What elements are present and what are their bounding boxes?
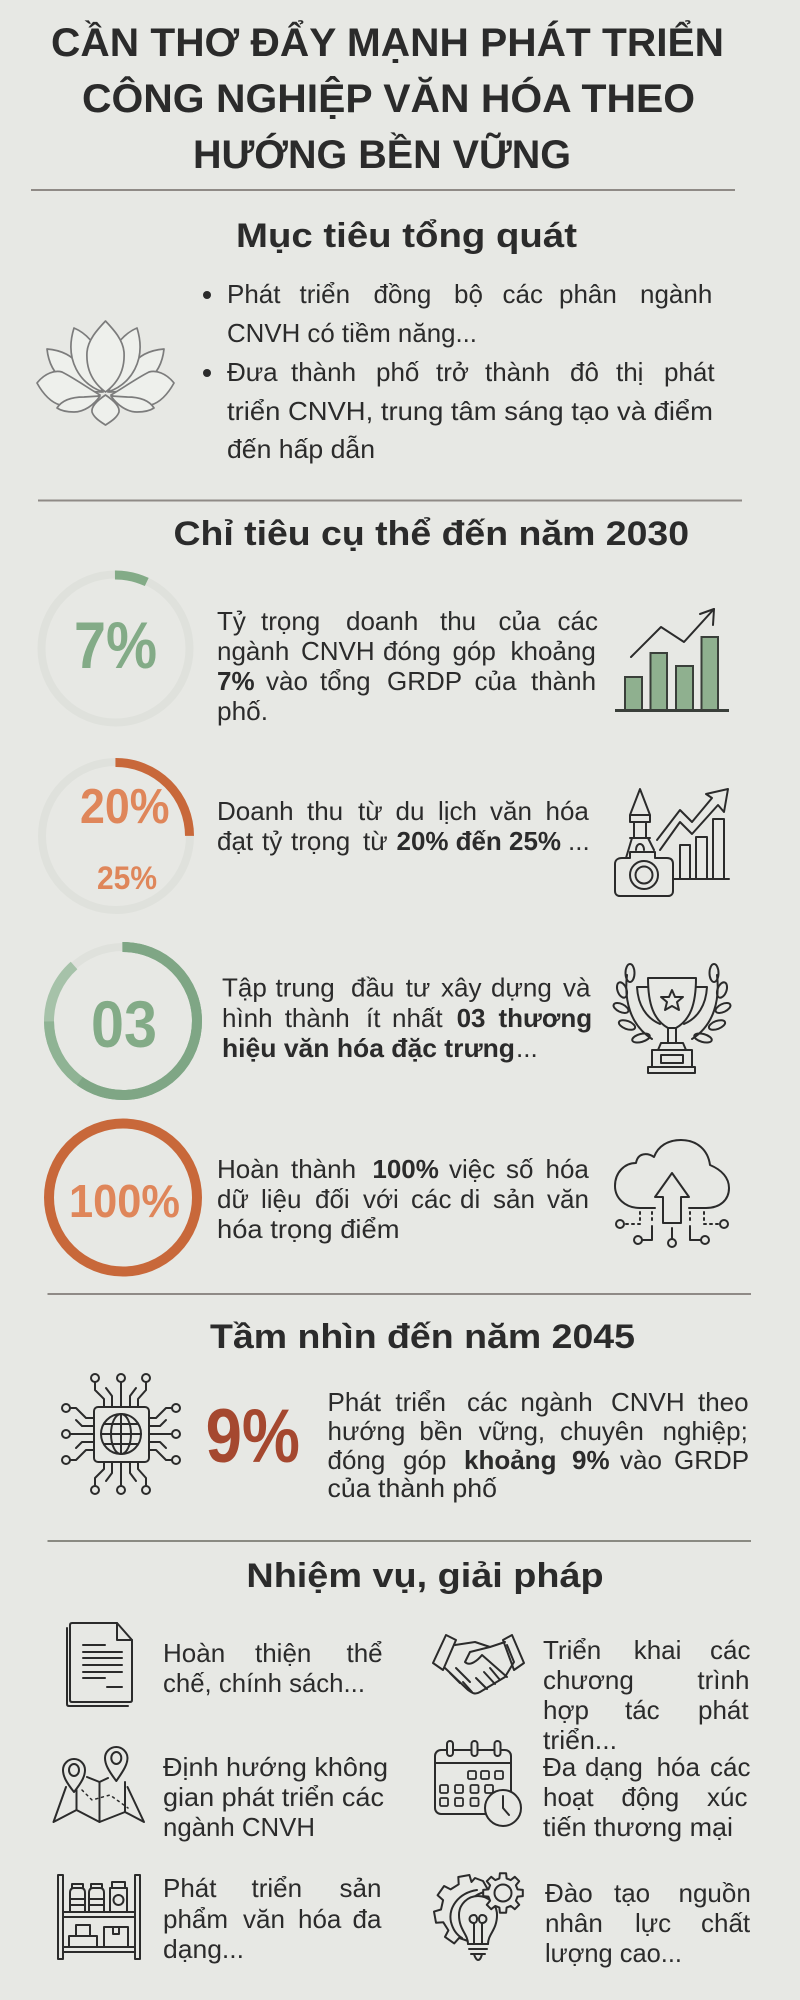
bullet list	[203, 279, 715, 464]
text: các	[710, 1752, 750, 1782]
bullet list: phát	[664, 357, 715, 387]
text	[545, 1878, 751, 1968]
text: 7%: vào	[266, 666, 315, 696]
text: triển	[252, 1873, 309, 1903]
text: ngành CNVH	[163, 1812, 315, 1842]
text: 03: đầu	[351, 972, 402, 1002]
text: 7%: tổng	[320, 666, 378, 696]
text: vision: các	[467, 1387, 515, 1417]
text: 03: dựng	[491, 972, 559, 1002]
text: 7%: ngành	[217, 636, 297, 666]
text: 03: tư	[406, 972, 437, 1002]
text: 100%: sản	[493, 1184, 542, 1214]
text: 100%: việc	[449, 1154, 502, 1184]
text	[543, 1752, 750, 1842]
text: 20-25%: lịch	[438, 796, 484, 826]
bullet list: Phát	[227, 279, 288, 309]
text: lực	[635, 1908, 678, 1938]
text: 03: nhất	[392, 1003, 450, 1033]
bullet list: phố	[376, 357, 427, 387]
text: nguồn	[678, 1878, 751, 1908]
text: phát	[698, 1695, 749, 1725]
text: 20-25%: từ	[363, 826, 395, 856]
text: động	[621, 1782, 686, 1812]
text: 7%: khoảng	[510, 636, 596, 666]
text: 20-25%: du	[396, 796, 432, 826]
text: khai	[634, 1635, 689, 1665]
text: triển...	[543, 1725, 617, 1755]
text: 03: ...	[516, 1033, 538, 1063]
text: 7%: của	[474, 666, 524, 696]
item: training	[434, 1873, 751, 1968]
progress ring 7%: 7%	[74, 608, 157, 682]
text: nhân	[545, 1908, 610, 1938]
text: 100%: với	[363, 1184, 406, 1214]
text: vision: theo	[698, 1387, 749, 1417]
text: 100%: di	[460, 1184, 487, 1214]
text	[163, 1752, 388, 1842]
text: sản	[340, 1873, 381, 1903]
text: 20-25%: đến	[456, 826, 509, 856]
icon: chip with globe	[62, 1374, 180, 1494]
icon: trophy with laurels	[612, 964, 732, 1073]
text: vision: Phát	[328, 1387, 388, 1417]
big number 9%: 9%	[206, 1394, 300, 1479]
progress ring 20-25%: 25%	[97, 860, 157, 896]
text: đa	[352, 1904, 382, 1934]
text: 100%: thành	[291, 1154, 363, 1184]
text: 7%: thành	[531, 666, 596, 696]
text: 20-25%: thu	[307, 796, 350, 826]
text: 7%: thu	[440, 606, 483, 636]
icon: map with pins	[54, 1747, 144, 1822]
text	[163, 1873, 382, 1964]
progress ring 7%	[42, 574, 190, 722]
text: hoạt	[543, 1782, 601, 1812]
bullet list: CNVH có tiềm năng...	[227, 318, 477, 348]
text: 100%	[217, 1154, 589, 1244]
text: tác	[625, 1695, 667, 1725]
text: 03	[222, 972, 592, 1063]
text: 20-25%: ...	[568, 826, 590, 856]
text: 7%: 7%	[217, 666, 262, 696]
bullet list: đến hấp dẫn	[227, 434, 375, 464]
progress ring 03: 03	[91, 987, 157, 1061]
text: vision	[328, 1387, 749, 1503]
text: 20-25%: 25%	[509, 826, 568, 856]
text: 20-25%: 20%	[396, 826, 456, 856]
text: vision: nghiệp;	[662, 1416, 748, 1446]
progress ring 20-25%: 20%	[80, 780, 170, 834]
bullet list: đồng	[374, 279, 439, 309]
bullet list: các	[502, 279, 550, 309]
heading: tasks and solutions: Nhiệm vụ, giải pháp	[246, 1557, 604, 1595]
text: 100%: Hoàn	[217, 1154, 286, 1184]
text: 20-25%: văn	[490, 796, 539, 826]
item: institutions	[67, 1623, 383, 1706]
text: 7%: trọng	[261, 606, 328, 636]
text: vision: khoảng	[464, 1445, 564, 1475]
text: 100%: dữ	[217, 1184, 256, 1214]
text: lượng cao...	[545, 1938, 682, 1968]
text: chất	[701, 1908, 751, 1938]
title	[51, 18, 724, 177]
text: 03: trung	[276, 972, 342, 1002]
text: 20-25%: từ	[358, 796, 390, 826]
text: 20-25%: hóa	[546, 796, 589, 826]
text: vision: đóng	[328, 1445, 393, 1475]
text: Phát	[163, 1873, 224, 1903]
text: 7%: góp	[452, 636, 503, 666]
text: 100%: hóa	[546, 1154, 589, 1184]
text: hợp	[543, 1695, 596, 1725]
text: 100%: hóa trọng điểm	[217, 1214, 400, 1244]
icon: cloud upload	[615, 1140, 729, 1247]
text: 03: hiệu văn hóa đặc trưng	[222, 1033, 515, 1063]
item: cooperation	[433, 1635, 750, 1755]
text: chế, chính sách...	[163, 1668, 365, 1698]
text: 100%: các	[411, 1184, 459, 1214]
text: vision: CNVH	[611, 1387, 692, 1417]
panel: target 20-25%	[42, 762, 729, 910]
text: Đa	[543, 1752, 583, 1782]
text: vision: vững,	[479, 1416, 552, 1446]
text: 7%: các	[558, 606, 598, 636]
text: 20-25%	[217, 796, 590, 856]
bullet list: đô	[570, 357, 606, 387]
text: Triển	[543, 1635, 608, 1665]
bullet list: thành	[485, 357, 557, 387]
icon: document	[67, 1623, 132, 1706]
icon: gears and light bulb	[434, 1873, 523, 1960]
text: vision: 9%	[572, 1445, 617, 1475]
text: 100%: số	[506, 1154, 541, 1184]
text: vision: góp	[403, 1445, 454, 1475]
text	[163, 1638, 383, 1698]
text: 03: xây	[441, 972, 489, 1002]
title: CẦN THƠ ĐẨY MẠNH PHÁT TRIỂN	[51, 18, 724, 65]
panel: target 100%	[49, 1124, 729, 1272]
icon: calendar and clock	[435, 1741, 521, 1826]
text: hóa	[298, 1904, 349, 1934]
text: vision: của thành phố	[328, 1473, 497, 1503]
bullet list: Đưa	[227, 357, 285, 387]
text: hóa	[657, 1752, 707, 1782]
text: tạo	[614, 1878, 657, 1908]
panel: vision 2045	[62, 1318, 749, 1503]
text: 7%: đóng	[383, 636, 448, 666]
text: xúc	[707, 1782, 747, 1812]
heading: vision 2045: Tầm nhìn đến năm 2045	[210, 1318, 635, 1356]
text: văn	[243, 1904, 292, 1934]
text	[543, 1635, 750, 1755]
title: HƯỚNG BỀN VỮNG	[193, 131, 571, 177]
icon: growth chart	[615, 609, 729, 710]
text: 20-25%: trọng	[291, 826, 358, 856]
item: spatial orientation	[54, 1747, 388, 1842]
bullet list: phân	[559, 279, 624, 309]
panel: tasks and solutions	[54, 1557, 751, 1968]
text: tiến thương mại	[543, 1812, 733, 1842]
heading: targets to 2030: Chỉ tiêu cụ thể đến năm 2030	[174, 515, 689, 553]
title: CÔNG NGHIỆP VĂN HÓA THEO	[82, 75, 695, 121]
text: 7%: GRDP	[387, 666, 469, 696]
text: 7%	[217, 606, 598, 726]
text: 100%: đối	[315, 1184, 357, 1214]
progress ring 20-25%	[42, 762, 190, 910]
text: vision: triển	[395, 1387, 453, 1417]
text: 03: Tập	[222, 972, 274, 1002]
text: 03: thương	[498, 1003, 592, 1033]
text: 03: hình	[222, 1003, 280, 1033]
text: Đào	[545, 1878, 600, 1908]
text: 03: và	[563, 972, 591, 1002]
text: chương	[543, 1665, 641, 1695]
text: 20-25%: Doanh	[217, 796, 301, 826]
text: 100%: văn	[547, 1184, 589, 1214]
text: 100%: 100%	[372, 1154, 446, 1184]
icon: product shelf	[58, 1875, 140, 1959]
text: vision: hướng	[328, 1416, 413, 1446]
bullet list: thị	[616, 357, 651, 387]
text: Định hướng không	[163, 1752, 388, 1782]
progress ring 100%	[49, 1124, 197, 1272]
progress ring 03	[49, 947, 197, 1095]
text: vision: GRDP	[674, 1445, 749, 1475]
panel: target 7%	[42, 574, 729, 726]
icon: handshake	[433, 1635, 524, 1693]
text: dạng...	[163, 1934, 244, 1964]
bullet list: bộ	[454, 279, 490, 309]
text: 7%: của	[498, 606, 548, 636]
text: vision: chuyên	[560, 1416, 651, 1446]
text: các	[710, 1635, 750, 1665]
text: thể	[346, 1638, 383, 1668]
text: dạng	[585, 1752, 650, 1782]
text: vision: vào	[620, 1445, 669, 1475]
item: cultural products	[58, 1873, 382, 1964]
text: vision: ngành	[520, 1387, 600, 1417]
text: 03: thành	[285, 1003, 357, 1033]
icon: lotus	[37, 321, 174, 425]
bullet list: triển	[300, 279, 357, 309]
text: 20-25%: đạt	[217, 826, 260, 856]
text: 03: ít	[366, 1003, 388, 1033]
text: 03: 03	[457, 1003, 493, 1033]
panel: general objectives	[37, 217, 715, 464]
heading: general objectives: Mục tiêu tổng quát	[236, 217, 578, 255]
icon: landmark, camera and growth	[615, 789, 729, 896]
item: trade promotion	[435, 1741, 750, 1842]
text: thiện	[255, 1638, 319, 1668]
bullet list: ngành	[640, 279, 712, 309]
text: 100%: liệu	[261, 1184, 309, 1214]
progress ring 100%: 100%	[69, 1175, 180, 1227]
text: Hoàn	[163, 1638, 232, 1668]
text: trình	[697, 1665, 749, 1695]
bullet list: thành	[291, 357, 363, 387]
bullet list: triển CNVH, trung tâm sáng tạo và điểm	[227, 396, 713, 426]
text: 7%: CNVH	[301, 636, 382, 666]
text: 20-25%: tỷ	[262, 826, 289, 856]
text: gian phát triển các	[163, 1782, 384, 1812]
text: phẩm	[163, 1904, 235, 1934]
text: 7%: doanh	[346, 606, 426, 636]
text: 7%: Tỷ	[217, 606, 253, 636]
text: vision: bền	[419, 1416, 470, 1446]
panel: target 03	[49, 947, 732, 1095]
bullet list: trở	[436, 357, 476, 387]
text: 7%: phố.	[217, 696, 268, 726]
